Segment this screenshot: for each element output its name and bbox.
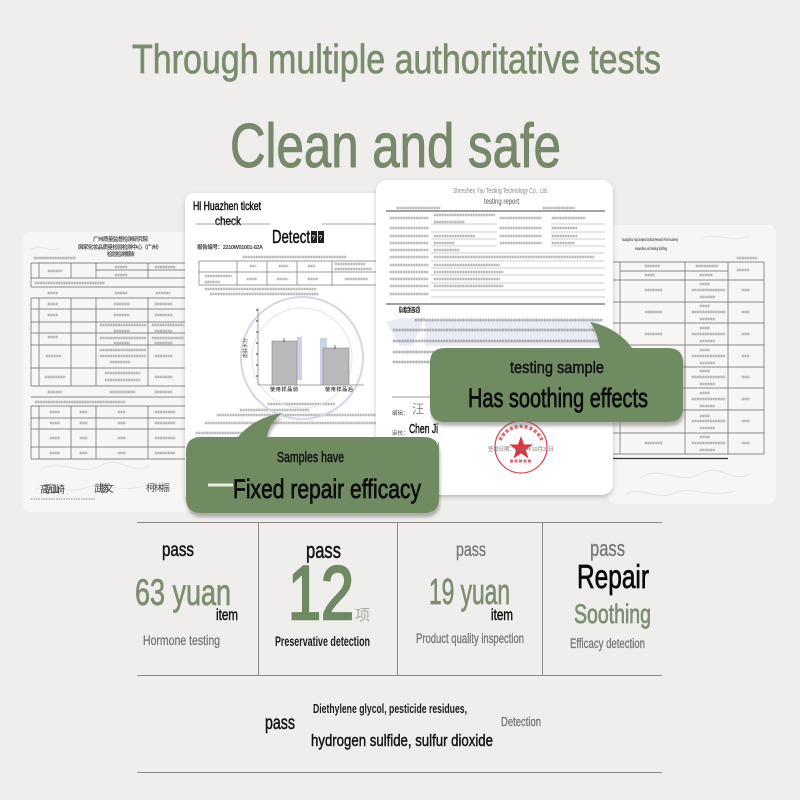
- panel: far right efficacy report: Guangzhou Yuga Inspection Bias Research Firm Academy: [622, 237, 678, 242]
- text: Hl Huazhen ticket check: Hl Huazhen ticket: [193, 199, 261, 213]
- row: other detection items: Diethylene glycol, pesticide residues,: [313, 702, 467, 716]
- chart: bar chart with stamp: 使用样品后: [325, 386, 353, 393]
- text: company name: Shenzhen Yiju Testing Technology Co., Ltd.: [453, 188, 548, 195]
- text: Detect: ?: [318, 235, 322, 242]
- cell: efficacy detection: Efficacy detection: [570, 636, 645, 651]
- panel: left inspection report: 武勝文: [94, 482, 114, 495]
- text: Fixed repair efficacy: Fixed repair efficacy: [233, 474, 421, 504]
- text: testing sample: testing sample: [510, 358, 604, 377]
- cell: product quality inspection: [416, 540, 524, 646]
- panel: centre test report with chart: [185, 193, 385, 503]
- cell: hormone testing: pass: [162, 540, 194, 561]
- panel: right test report: 编辑：: [392, 409, 409, 417]
- panel: centre test report with chart: 报告编号：2210W01001-02A: [197, 243, 263, 251]
- panel: left inspection report: 检验检测报告: [107, 250, 135, 258]
- cell: hormone testing: Hormone testing: [143, 633, 220, 648]
- callout: samples have, fixed repair efficacy: [186, 413, 439, 513]
- row: other detection items: Detection: [501, 715, 541, 729]
- cell: hormone testing: 63 yuan: [135, 572, 231, 613]
- chart: bar chart with stamp: 使用样品前: [270, 386, 298, 393]
- heading: Clean and safe: Clean and safe: [230, 112, 561, 181]
- cell: efficacy detection: [570, 536, 651, 651]
- chart: bar chart with stamp: [241, 297, 364, 419]
- cell: preservative detection: pass: [306, 538, 341, 563]
- cell: efficacy detection: pass: [590, 536, 625, 561]
- panel: right test report: 审核：: [392, 429, 409, 437]
- panel: right test report: 汪贵: [412, 402, 442, 416]
- row: other detection items: hydrogen sulfide, sulfur dioxide: [311, 731, 493, 750]
- panel: right test report: 签发日期：2023年10月31日: [488, 445, 554, 453]
- callout: testing sample, has soothing effects: [430, 322, 683, 422]
- cell: preservative detection: 12: [288, 551, 354, 636]
- table rules: [137, 522, 662, 772]
- cell: preservative detection: Preservative detection: [275, 634, 370, 649]
- cell: efficacy detection: Soothing: [574, 599, 651, 629]
- cell: preservative detection: [275, 538, 370, 649]
- cell: product quality inspection: Product quality inspection: [416, 631, 524, 646]
- cell: efficacy detection: Repair: [577, 558, 649, 595]
- text: Detect: ?: [312, 235, 316, 242]
- text: testing report: testing report: [484, 197, 520, 206]
- panel: left inspection report: 广州质量监督检测研究院: [93, 235, 148, 243]
- cell: hormone testing: [135, 540, 238, 648]
- panel: right test report: 武利: [412, 441, 440, 454]
- row: other detection items: pass: [265, 713, 295, 734]
- icon: red seal stamp: [495, 421, 547, 473]
- title: Through multiple authoritative tests: Through multiple authoritative tests: [132, 36, 661, 82]
- panel: right test report: [376, 180, 613, 495]
- text: Hl Huazhen ticket check: [193, 199, 261, 228]
- text: Hl Huazhen ticket check: check: [215, 214, 242, 228]
- cell: hormone testing: item: [216, 607, 238, 624]
- text: Detect: Detect: [272, 227, 310, 247]
- panel: left inspection report: 柯林振: [146, 482, 170, 493]
- panel: far right efficacy report: [608, 225, 776, 504]
- row: other detection items: [265, 702, 541, 750]
- text: Chen Ji: Chen Ji: [409, 421, 438, 436]
- panel: right test report: 【试验结论】: [395, 305, 424, 314]
- chart: bar chart with stamp: 皮肤水分: [242, 338, 249, 358]
- panel: left inspection report: 国家化妆品质量检验检测中心（广州）: [78, 243, 162, 251]
- panel: left inspection report: 高因山崎: [40, 483, 65, 496]
- cell: product quality inspection: 19 yuan: [429, 571, 510, 612]
- text: Samples have: Samples have: [277, 449, 344, 466]
- text: Has soothing effects: Has soothing effects: [468, 383, 648, 413]
- panel: far right efficacy report: Inspection and testing drafting: [635, 246, 667, 251]
- cell: product quality inspection: pass: [456, 540, 486, 561]
- cell: preservative detection: 项: [355, 607, 370, 624]
- panel: left inspection report: [23, 232, 198, 512]
- cell: product quality inspection: item: [491, 607, 513, 624]
